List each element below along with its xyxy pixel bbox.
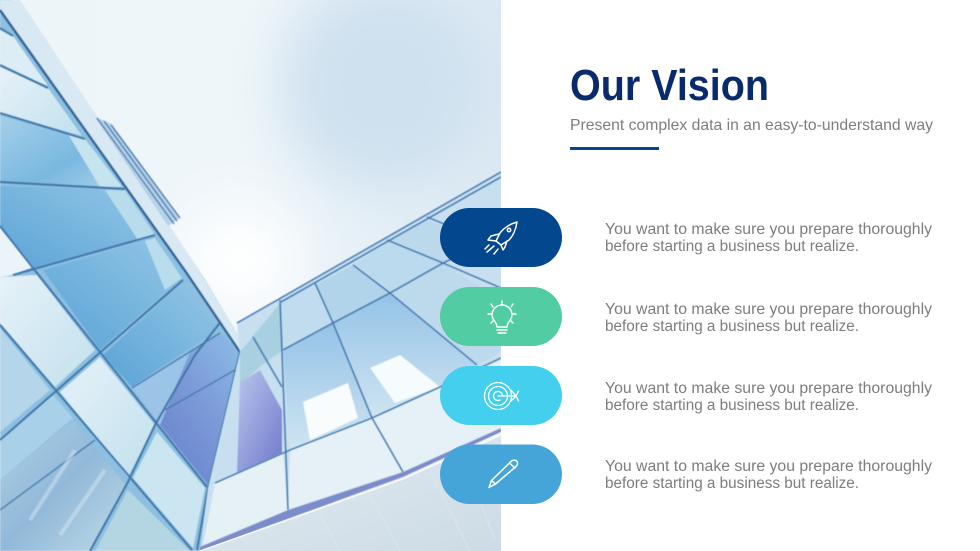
icon: rocket <box>485 222 517 254</box>
left glass facade <box>0 0 243 551</box>
item 1: rocket: before starting a business but realize. <box>605 238 859 255</box>
icon: target <box>484 382 518 410</box>
item 2: light bulb: before starting a business but realize. <box>605 318 859 335</box>
pill <box>440 208 562 267</box>
left facade mullions <box>0 28 240 551</box>
item 3: target <box>440 366 932 425</box>
photo: glass building against sky <box>0 0 501 551</box>
right glass facade <box>200 172 501 551</box>
title underline <box>570 147 659 150</box>
icon: light bulb <box>488 301 516 333</box>
title: Our Vision <box>570 61 769 110</box>
pill <box>440 287 562 346</box>
item 3: target: before starting a business but realize. <box>605 397 859 414</box>
item text: You want to make sure you prepare thoroughly <box>605 221 932 238</box>
right facade mullions <box>215 172 501 510</box>
soffit below building <box>200 434 501 551</box>
subtitle: Present complex data in an easy-to-understand way <box>570 117 933 134</box>
item 4: pencil <box>440 444 932 504</box>
pill <box>440 366 562 425</box>
item 2: light bulb <box>440 287 932 346</box>
icon: pencil <box>489 460 518 488</box>
item text: You want to make sure you prepare thoroughly <box>605 301 932 318</box>
vertical fin on edge <box>95 117 180 226</box>
left facade edge frame <box>0 0 243 352</box>
sky <box>0 0 501 350</box>
item text: You want to make sure you prepare thoroughly <box>605 380 932 397</box>
item 1: rocket <box>440 208 932 267</box>
item 4: pencil: before starting a business but realize. <box>605 475 859 492</box>
item text: You want to make sure you prepare thoroughly <box>605 458 932 475</box>
pill <box>440 444 562 504</box>
